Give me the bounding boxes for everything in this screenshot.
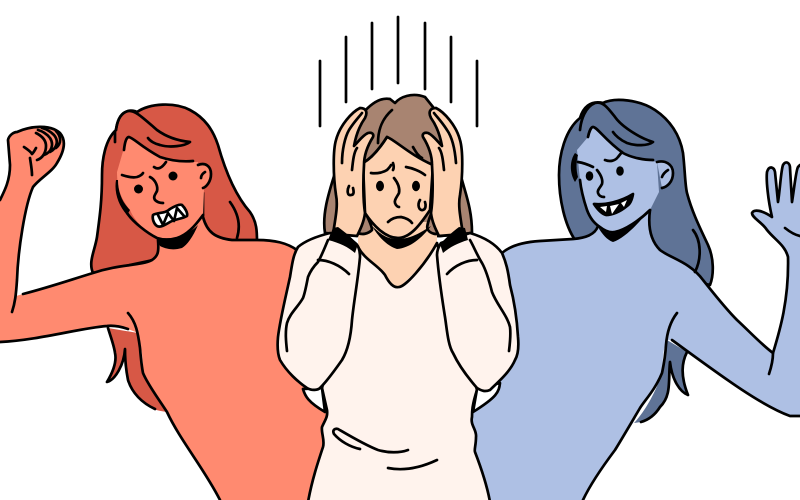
blue body and raised arm: [465, 162, 800, 500]
red fringe: [115, 111, 239, 238]
shirt wrinkles: [333, 429, 437, 469]
left sleeve folds: [286, 240, 349, 351]
figure: sly blue woman: [465, 100, 800, 500]
centre nose: [394, 178, 399, 207]
centre face: [363, 137, 433, 238]
centre ear-level hair lobes: [358, 214, 440, 234]
blue hair: [559, 100, 713, 285]
centre worried eyebrows: [371, 163, 425, 175]
red body outlines: [0, 127, 64, 312]
centre sweat drop on face: [419, 200, 426, 210]
red neck shadow: [157, 225, 198, 249]
red ear inner: [201, 172, 205, 178]
figure: angry red woman: [0, 105, 335, 500]
blue dark hair tuck: [571, 153, 578, 182]
blue eyebrows: [578, 152, 622, 167]
red fist details: [24, 128, 60, 175]
red face outlines: [124, 137, 203, 240]
red angry eyebrows: [122, 162, 166, 177]
blue grinning mouth: [594, 194, 633, 215]
red ear: [198, 164, 211, 188]
white gap under right sleeve: [473, 383, 500, 412]
centre frown: [388, 217, 412, 223]
red lower hair lines: [107, 328, 155, 409]
red arm and torso edge: [0, 193, 297, 500]
blue arm and torso edge: [583, 313, 800, 500]
blue lower hair lines: [641, 352, 688, 422]
centre neck shadow: [372, 226, 431, 249]
blue ear inner: [662, 170, 668, 177]
centre neck: [358, 222, 437, 290]
blue lower hair: [634, 340, 688, 423]
left cuff: [328, 227, 358, 253]
blue teeth: [600, 200, 627, 214]
figure: stressed woman in centre: [278, 95, 518, 500]
right cuff: [440, 227, 468, 253]
right sleeve: [437, 233, 518, 391]
right hand: [423, 108, 463, 236]
blue fringe: [580, 103, 700, 272]
blue face outlines: [580, 127, 653, 232]
blue neck shadow: [598, 209, 650, 242]
red nose: [150, 177, 163, 203]
right sleeve folds: [447, 240, 510, 351]
blue ear: [657, 161, 673, 188]
red body and raised arm: [0, 127, 335, 500]
red dark hair tuck: [115, 180, 130, 215]
blue eyes: [586, 166, 624, 181]
centre shirt body: [308, 243, 490, 500]
blue hand outline: [752, 162, 800, 374]
red lower hair: [107, 328, 167, 412]
left sleeve: [278, 233, 360, 390]
centre fringe: [363, 110, 422, 163]
centre hair back: [324, 95, 472, 236]
centre eyes: [376, 181, 420, 191]
white gap under left sleeve: [303, 388, 325, 412]
blue face: [577, 127, 659, 232]
red face: [117, 137, 204, 240]
blue body outlines: [502, 210, 773, 353]
red snarling mouth: [153, 205, 187, 227]
red eyes: [134, 172, 178, 194]
blue nose: [597, 170, 604, 197]
red hair: [91, 105, 257, 273]
red teeth: [158, 208, 184, 225]
stress lines above head: [320, 17, 477, 126]
left hand: [333, 108, 373, 236]
